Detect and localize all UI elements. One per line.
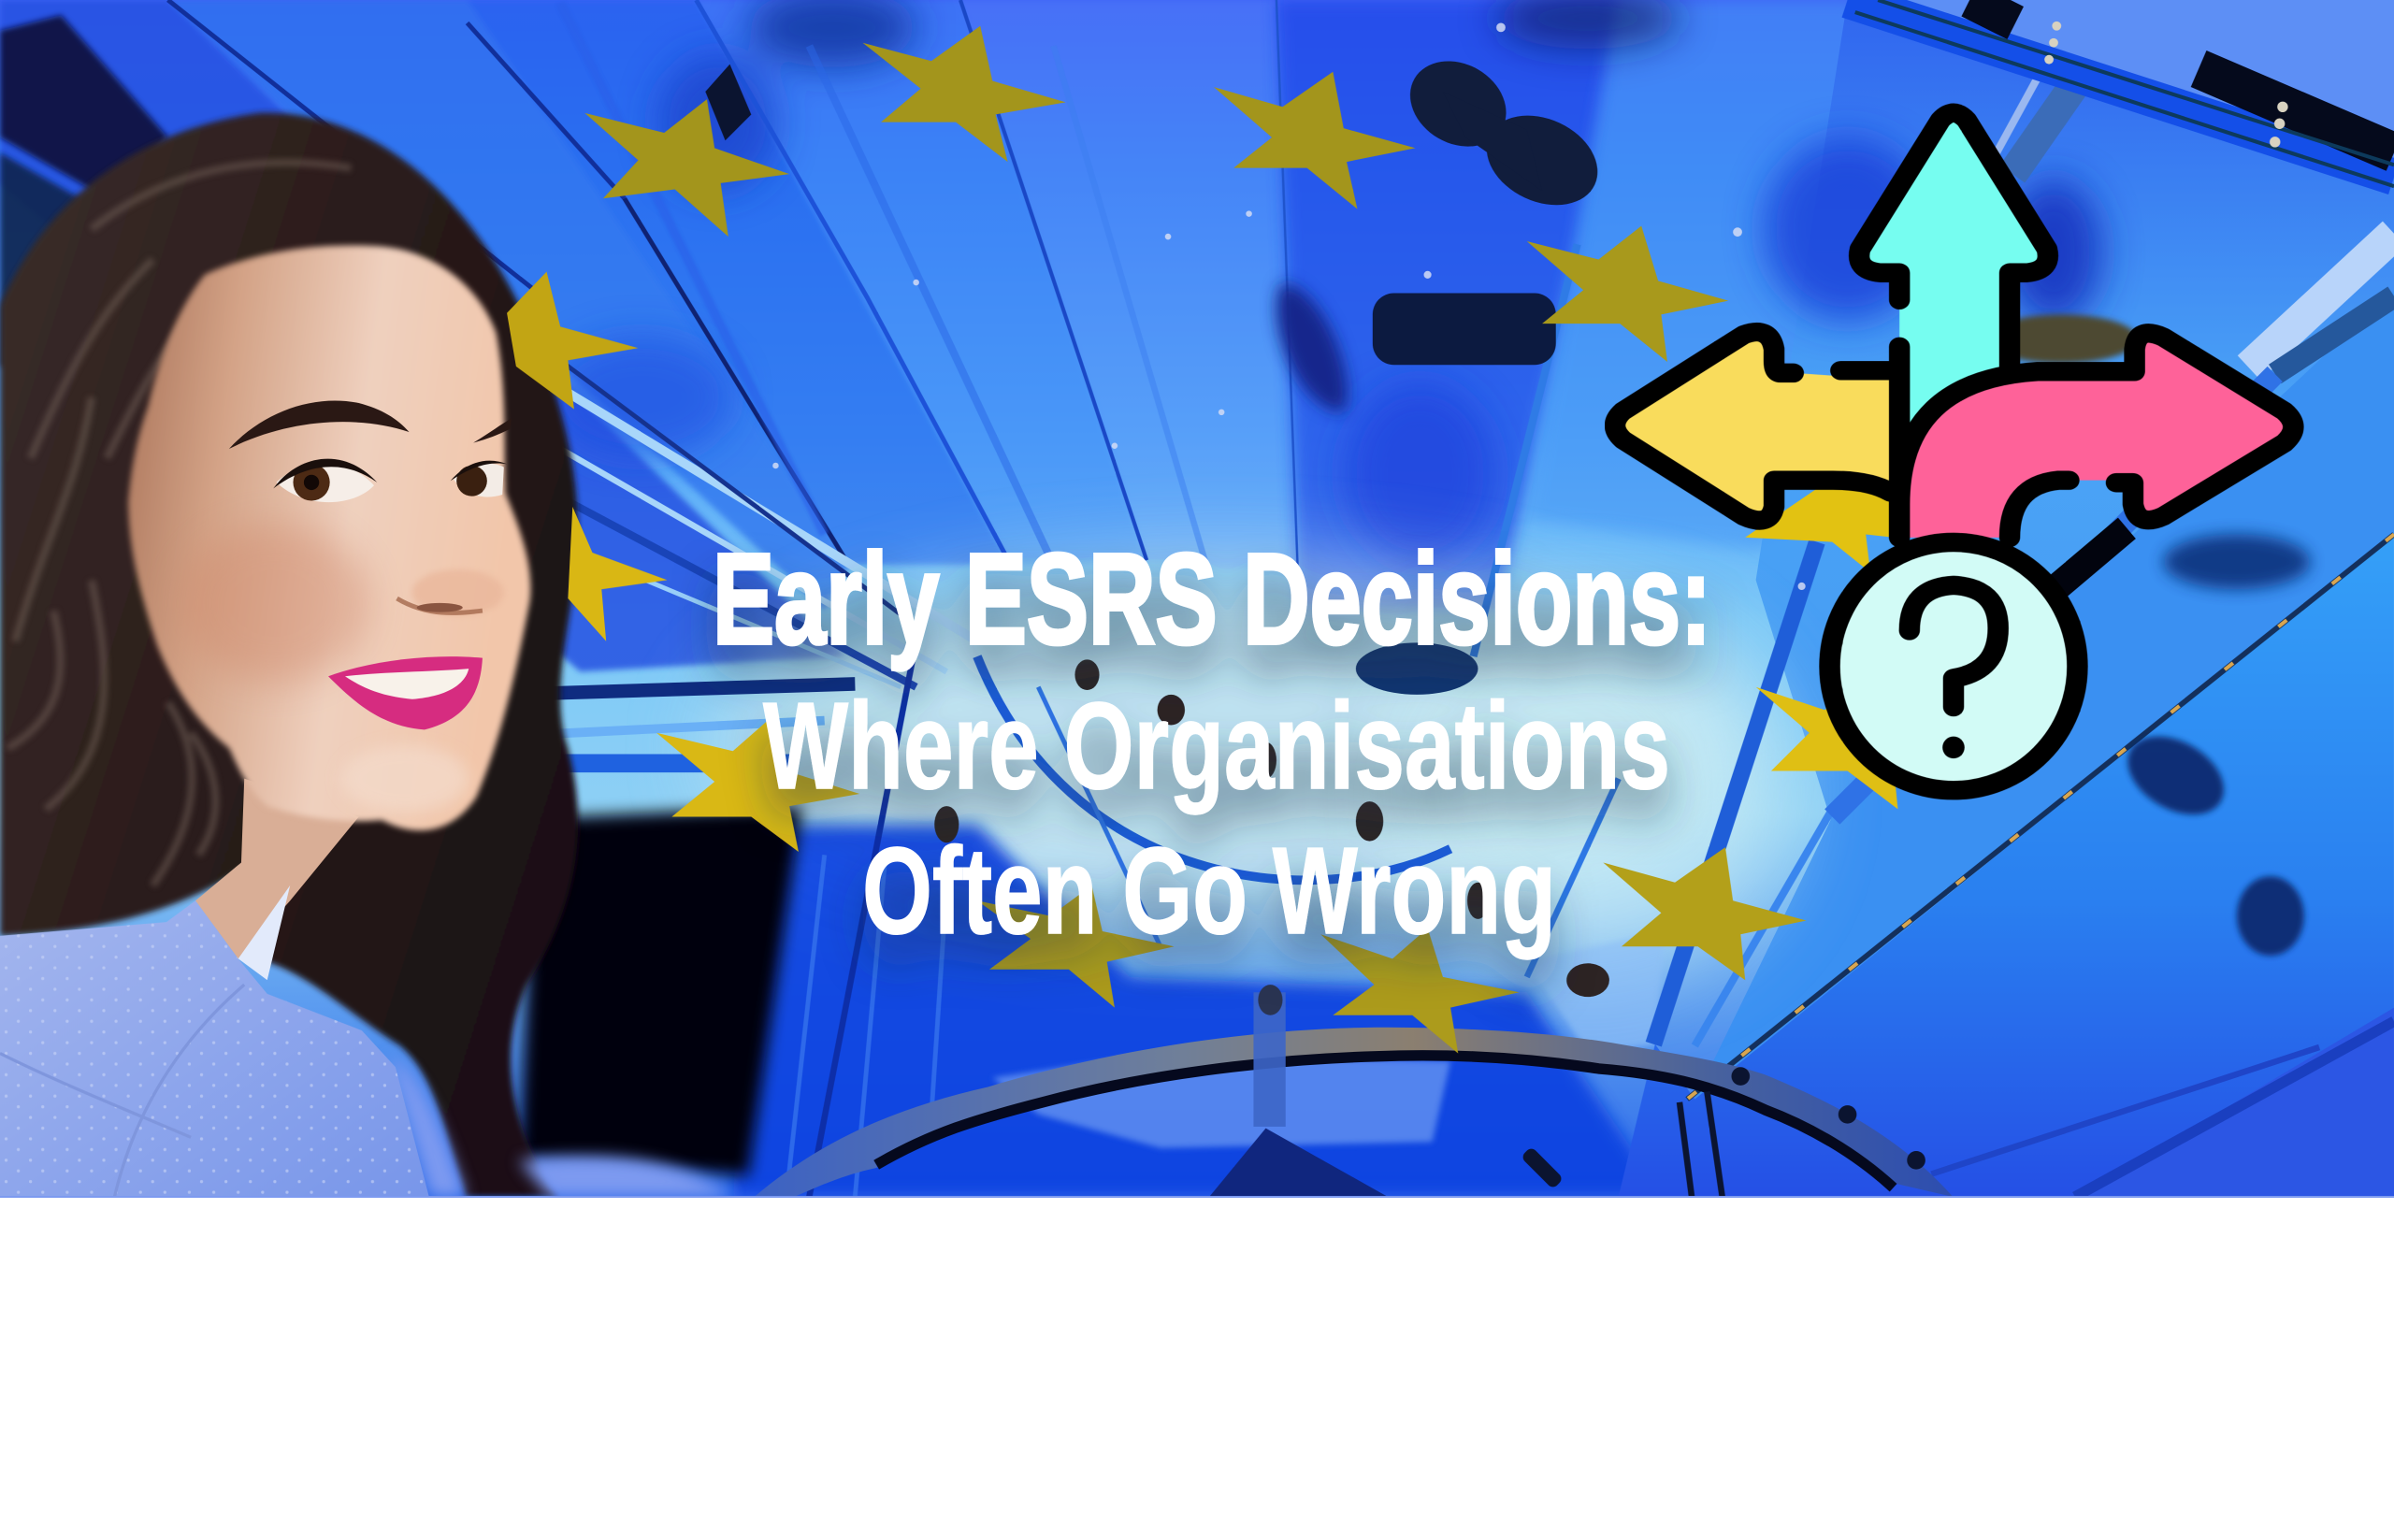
- star 6 over hair edge: [568, 507, 667, 641]
- woman portrait: [0, 15, 733, 1197]
- right large glass panel: [1619, 534, 2394, 1197]
- blouse: [0, 900, 429, 1197]
- hair: [0, 113, 578, 1197]
- star 8: [977, 885, 1175, 1008]
- right eye: [451, 461, 507, 497]
- star 1: [584, 99, 789, 237]
- hair highlights: [7, 163, 352, 885]
- top-right roof beam: [1848, 0, 2394, 186]
- blouse dots: [0, 900, 429, 1197]
- icon: cyan up arrow: [1859, 113, 2048, 538]
- banner image: [0, 0, 2394, 1197]
- soft blue blotches: [550, 0, 2102, 565]
- infographic canvas: [0, 0, 2394, 1198]
- star 7: [656, 717, 859, 852]
- left eye: [273, 459, 377, 502]
- mouth: [328, 656, 483, 729]
- panel strips and lines: [168, 0, 2394, 1197]
- icon: question mark circle: [1830, 542, 2077, 790]
- icon: three arrows with question mark: [1615, 113, 2293, 790]
- EU stars ring: [584, 26, 1924, 1054]
- people on the stairs: [934, 659, 1609, 997]
- deep blue stairwell: [733, 825, 1665, 1197]
- beam lights: [2044, 22, 2288, 148]
- right eyebrow: [473, 418, 512, 442]
- star 4: [1527, 226, 1728, 362]
- star 5 over hair edge: [507, 272, 638, 410]
- star 12: [1745, 488, 1894, 572]
- icon: pink right arrow: [1899, 333, 2293, 538]
- neck: [195, 779, 359, 958]
- star 3: [1214, 72, 1416, 209]
- sparkle lights: [772, 22, 1806, 591]
- jaw highlight: [340, 745, 469, 813]
- title line 2: Where Organisations: [763, 677, 1670, 814]
- background: blue glass atrium: [0, 0, 2394, 1197]
- dark void lower left: [519, 806, 801, 1175]
- star 11: [1756, 671, 1924, 809]
- title line 3: Often Go Wrong: [862, 822, 1556, 959]
- star 10: [1603, 847, 1806, 980]
- fan of glass panels: [0, 0, 1298, 671]
- railing ring: [755, 1028, 1953, 1197]
- title: [713, 527, 1711, 959]
- face: [128, 245, 530, 830]
- left eyebrow: [229, 401, 410, 449]
- star 2: [862, 26, 1066, 162]
- cheek blush: [180, 524, 369, 683]
- central haze: [717, 572, 1725, 924]
- title line 1: Early ESRS Decisions:: [713, 527, 1711, 671]
- blouse fold: [0, 985, 244, 1197]
- star 9: [1320, 928, 1520, 1054]
- collar: [238, 885, 290, 980]
- shoes seen through the glass: [705, 44, 2310, 956]
- icon: yellow left arrow: [1615, 332, 1896, 520]
- pale fade at bottom: [389, 1057, 733, 1197]
- nose: [397, 569, 504, 615]
- banner bottom edge: [0, 1196, 2394, 1198]
- top-left dark edge of photo: [0, 15, 168, 367]
